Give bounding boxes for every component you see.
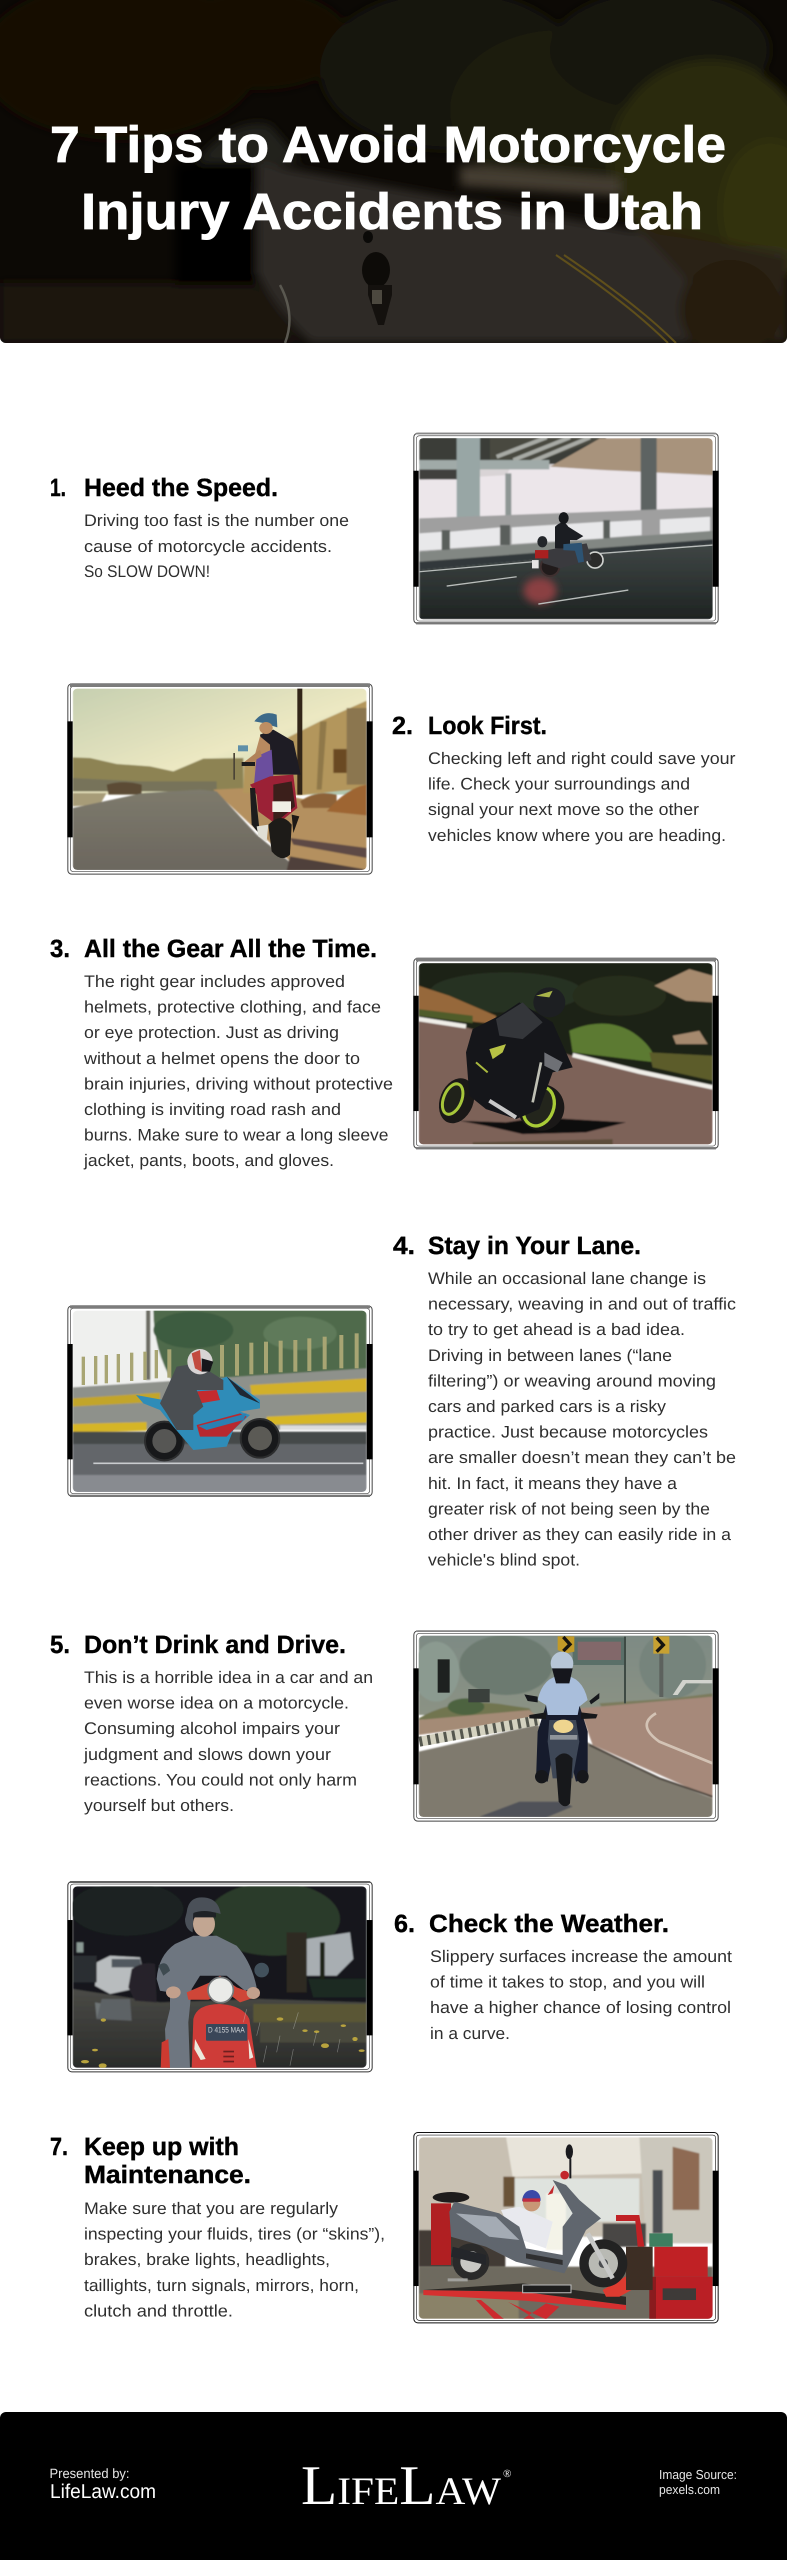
body text: [428, 749, 736, 845]
body text: [430, 1947, 732, 2043]
heading: 3.: [50, 935, 70, 963]
photo frame: scooter rider in the rain: D 4155 MAA: [208, 2025, 245, 2034]
heading: Maintenance.: [84, 2161, 251, 2189]
heading: Don’t Drink and Drive.: [84, 1631, 346, 1659]
body text: other driver as they can easily ride in a: [428, 1525, 732, 1544]
body text: necessary, weaving in and out of traffic: [428, 1295, 736, 1314]
body text: [84, 2199, 385, 2320]
heading: 1.: [50, 474, 66, 502]
body text: clutch and throttle.: [84, 2301, 233, 2320]
header banner: [0, 0, 787, 360]
panel: tip 7: [50, 2133, 719, 2323]
body text: vehicles know where you are heading.: [428, 826, 726, 845]
body text: in a curve.: [430, 2024, 510, 2043]
body text: So SLOW DOWN!: [84, 562, 210, 581]
footer background: [0, 2412, 787, 2560]
body text: cars and parked cars is a risky: [428, 1397, 667, 1416]
photo frame: scooter rider in the rain: [67, 1881, 373, 2072]
body text: Consuming alcohol impairs your: [84, 1719, 340, 1738]
body text: Driving too fast is the number one: [84, 511, 349, 530]
body text: judgment and slows down your: [83, 1745, 331, 1764]
body text: helmets, protective clothing, and face: [84, 998, 381, 1017]
body text: [83, 972, 393, 1170]
heading: All the Gear All the Time.: [84, 935, 377, 963]
panel: tip 2: [67, 683, 736, 874]
presented by: Presented by:: [50, 2466, 130, 2481]
heading: 6.: [394, 1910, 415, 1938]
heading: Heed the Speed.: [84, 474, 278, 502]
body text: Slippery surfaces increase the amount: [430, 1947, 732, 1966]
body text: clothing is inviting road rash and: [84, 1100, 341, 1119]
body text: without a helmet opens the door to: [83, 1049, 360, 1068]
body text: This is a horrible idea in a car and an: [84, 1668, 373, 1687]
body text: taillights, turn signals, mirrors, horn,: [84, 2276, 359, 2295]
body text: are smaller doesn’t mean they can’t be: [428, 1448, 736, 1467]
heading: 5.: [50, 1631, 70, 1659]
body text: brakes, brake lights, headlights,: [84, 2250, 330, 2269]
body text: greater risk of not being seen by the: [428, 1499, 710, 1518]
logo: LifeLaw: LIFELAW: [301, 2455, 501, 2517]
body text: inspecting your fluids, tires (or “skins”),: [84, 2225, 385, 2244]
body text: or eye protection. Just as driving: [84, 1023, 339, 1042]
heading: Look First.: [428, 712, 547, 740]
body text: The right gear includes approved: [84, 972, 345, 991]
body text: While an occasional lane change is: [428, 1269, 706, 1288]
photo frame: rider on a scooter at sunset: [67, 683, 373, 874]
body text: have a higher chance of losing control: [430, 1998, 731, 2017]
body text: practice. Just because motorcycles: [428, 1423, 708, 1442]
heading: Keep up with: [84, 2133, 239, 2161]
photo frame: motorcycle passing under overpass: [413, 433, 719, 624]
image source: pexels.com: [659, 2482, 720, 2497]
body text: signal your next move so the other: [428, 800, 699, 819]
body text: jacket, pants, boots, and gloves.: [83, 1151, 334, 1170]
body text: reactions. You could not only harm: [84, 1770, 357, 1789]
image source: [659, 2467, 737, 2497]
body text: life. Check your surroundings and: [428, 774, 690, 794]
body text: hit. In fact, it means they have a: [428, 1474, 678, 1493]
presented by: [50, 2466, 156, 2503]
body text: [84, 511, 349, 581]
photo frame: leaning motorcycle in a curve: [413, 958, 719, 1149]
logo: LifeLaw: ®: [503, 2468, 511, 2480]
body text: [428, 1269, 736, 1570]
heading: 7.: [50, 2133, 68, 2161]
presented by: LifeLaw.com: [50, 2481, 156, 2503]
title: Injury Accidents in Utah: [81, 183, 703, 240]
body text: even worse idea on a motorcycle.: [84, 1694, 349, 1713]
title: 7 Tips to Avoid Motorcycle: [50, 116, 726, 173]
rider: [362, 231, 392, 325]
body text: brain injuries, driving without protective: [84, 1074, 393, 1093]
panel: tip 3: [50, 935, 719, 1170]
body text: of time it takes to stop, and you will: [430, 1973, 705, 1992]
body text: to try to get ahead is a bad idea.: [428, 1320, 685, 1339]
panel: tip 1: [50, 433, 719, 624]
heading: 2.: [392, 712, 413, 740]
panel: tip 4: [67, 1232, 736, 1570]
panel: tip 5: [50, 1630, 719, 1821]
body text: cause of motorcycle accidents.: [84, 537, 332, 556]
body text: yourself but others.: [84, 1796, 234, 1815]
image source: Image Source:: [659, 2467, 737, 2482]
panel: tip 6: [67, 1881, 732, 2072]
heading: Check the Weather.: [429, 1910, 669, 1938]
title: [50, 116, 726, 240]
photo frame: mechanic with a scooter on a lift: [413, 2133, 719, 2323]
photo frame: sport bike on a highway: [67, 1305, 373, 1497]
body text: Make sure that you are regularly: [84, 2199, 339, 2218]
body text: burns. Make sure to wear a long sleeve: [84, 1126, 388, 1145]
photo frame: rider facing camera on a rural road: [413, 1630, 719, 1821]
body text: vehicle's blind spot.: [428, 1551, 580, 1570]
body text: Driving in between lanes (“lane: [428, 1346, 672, 1365]
footer: [0, 2412, 787, 2560]
body text: filtering”) or weaving around moving: [428, 1371, 716, 1390]
heading: Stay in Your Lane.: [428, 1232, 641, 1260]
photo: motorcyclist on a wooded road: [0, 0, 787, 360]
body text: [83, 1668, 373, 1815]
heading: 4.: [393, 1232, 415, 1260]
heading: [50, 2133, 251, 2189]
body text: Checking left and right could save your: [428, 749, 736, 768]
